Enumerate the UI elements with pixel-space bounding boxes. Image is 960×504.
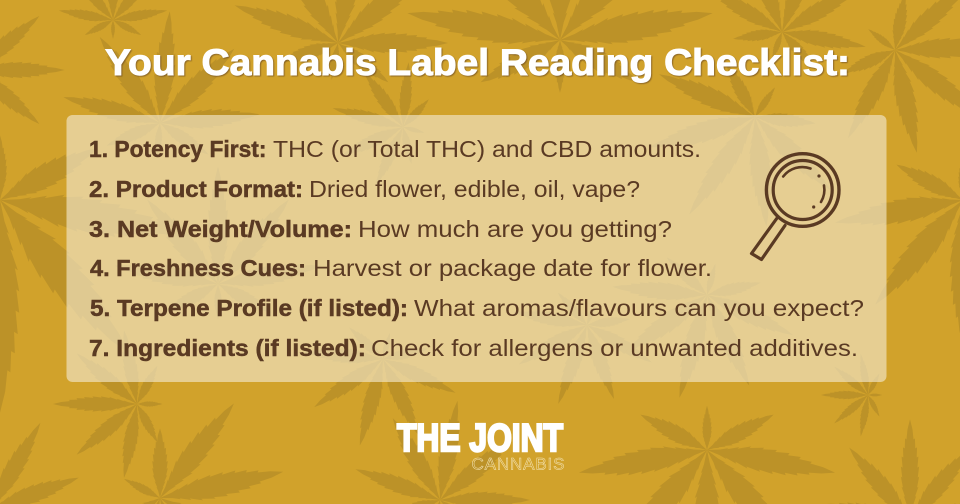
checklist item 2 [89,176,640,202]
logo subtitle: CANNABIS [472,454,564,474]
panel: checklist [66,115,886,382]
checklist item 4: 4. Freshness Cues: [90,255,306,281]
checklist item 7: 7. Ingredients (if listed): [89,335,366,361]
checklist item 2: 2. Product Format: [89,176,303,202]
icon: magnifying glass [752,154,839,260]
checklist item 7 [89,335,858,361]
checklist item 7: Check for allergens or unwanted additives. [371,335,858,361]
logo wordmark: THE JOINT [397,417,563,460]
title: Your Cannabis Label Reading Checklist: [105,42,850,83]
checklist item 2: Dried flower, edible, oil, vape? [309,176,640,202]
panel background [66,115,886,382]
checklist item 4 [90,255,712,281]
checklist item 4: Harvest or package date for flower. [313,255,712,281]
checklist item 3: 3. Net Weight/Volume: [89,216,352,242]
checklist item 5 [90,295,864,321]
checklist item 5: What aromas/flavours can you expect? [414,295,864,321]
checklist item 3: How much are you getting? [358,216,672,242]
checklist item 5: 5. Terpene Profile (if listed): [90,295,408,321]
checklist item 3 [89,216,672,242]
checklist item 1: THC (or Total THC) and CBD amounts. [273,136,701,162]
logo: The Joint Cannabis [397,417,564,474]
checklist item 1: 1. Potency First: [89,136,266,162]
checklist item 1 [89,136,701,162]
